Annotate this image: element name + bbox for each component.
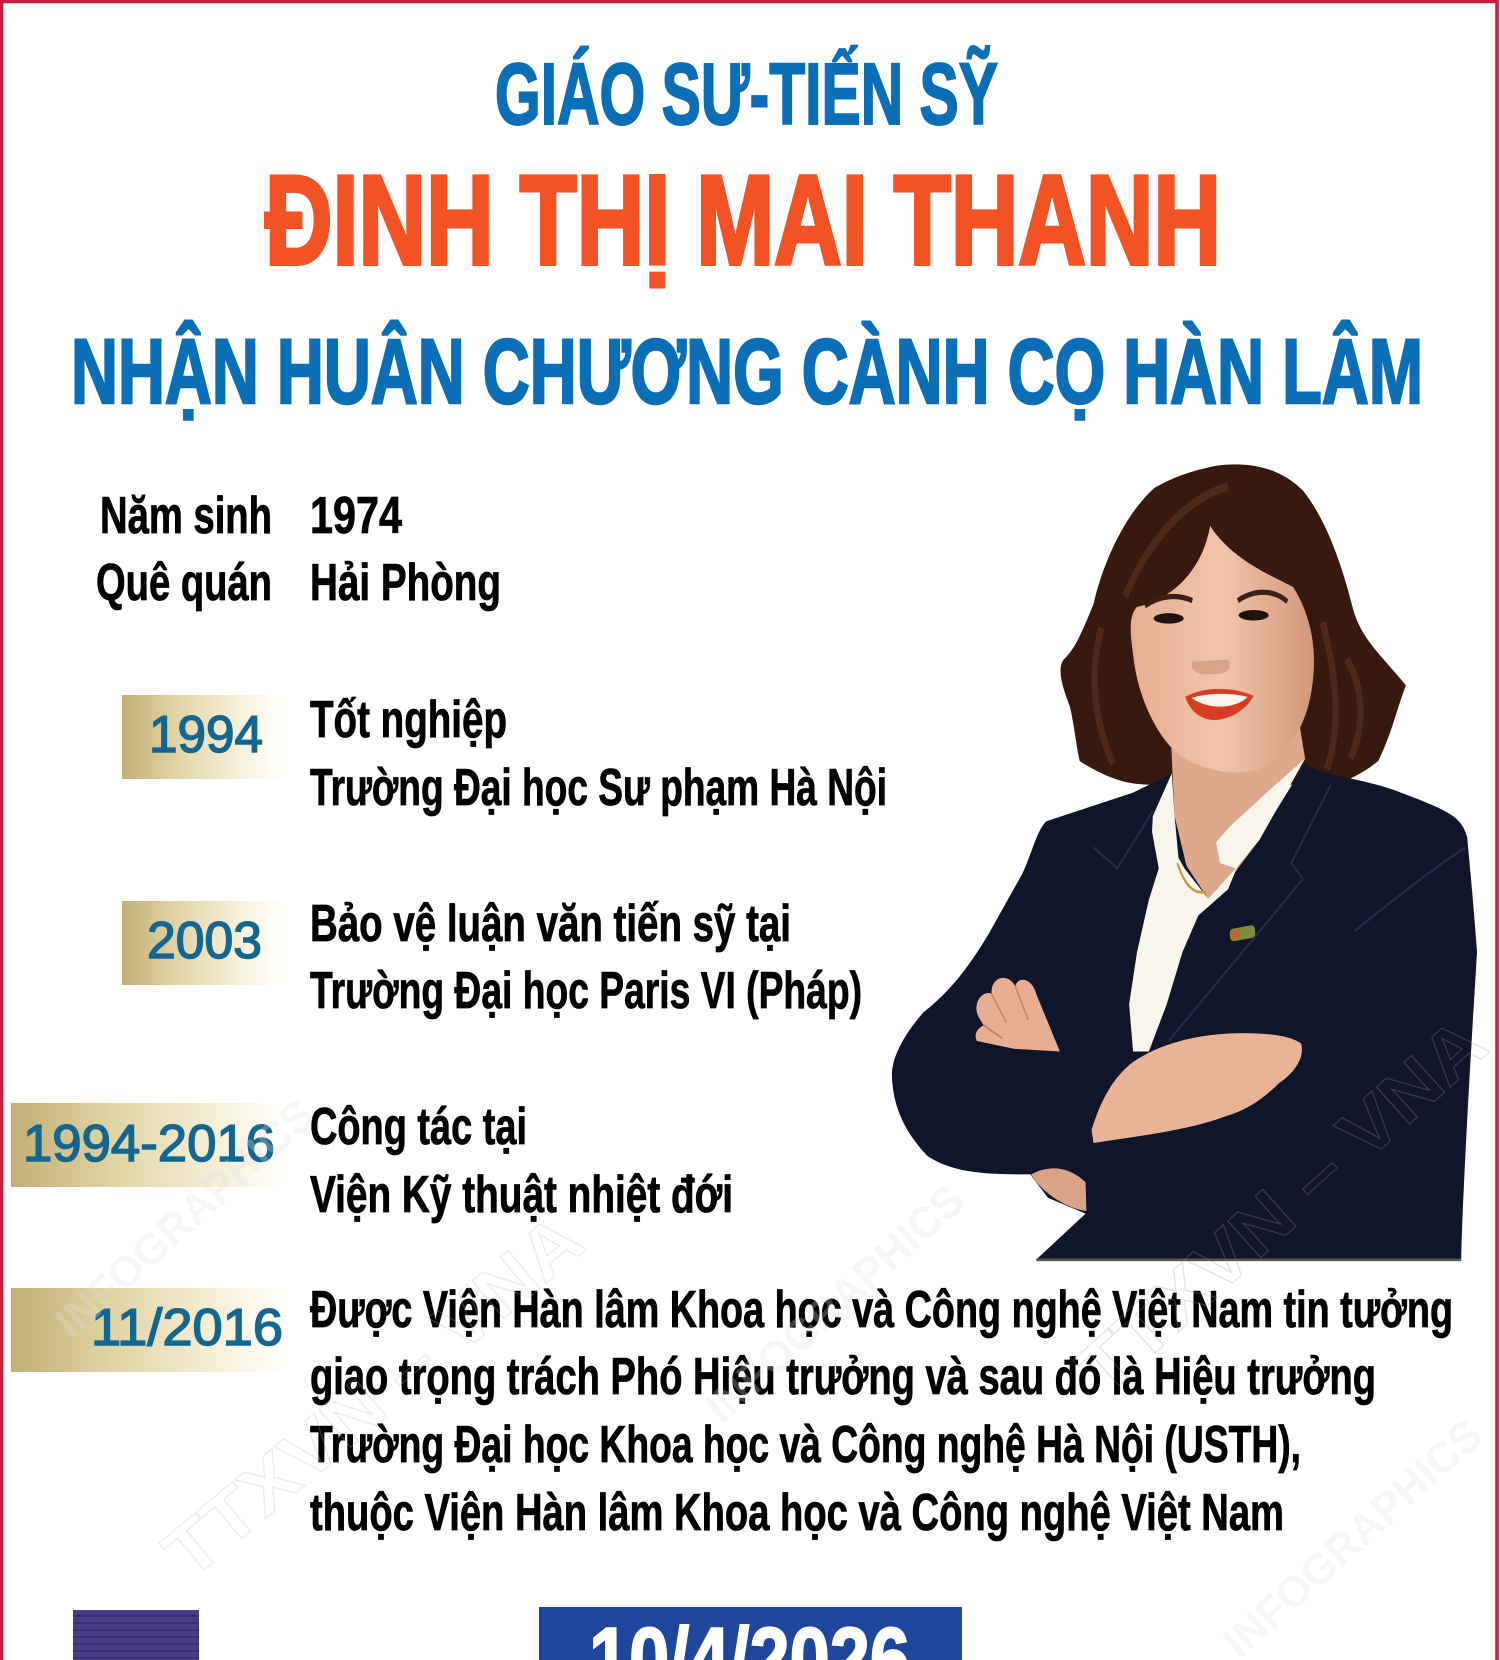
text 11/2016	[310, 1281, 1453, 1542]
hand	[976, 978, 1060, 1051]
shirt	[1129, 759, 1305, 1051]
medal ribbon	[73, 1610, 199, 1660]
timeline 1994-2016	[11, 1098, 733, 1224]
text 2003: Trường Đại học Paris VI (Pháp)	[310, 962, 862, 1020]
hair highlights	[1095, 487, 1361, 769]
lower hand	[1031, 1168, 1086, 1211]
title	[71, 46, 1423, 423]
text 2003: Bảo vệ luận văn tiến sỹ tại	[310, 895, 791, 953]
title line 1: GIÁO SƯ-TIẾN SỸ	[495, 46, 998, 143]
timeline 1994	[122, 691, 887, 817]
year label 1994: 1994	[149, 706, 263, 764]
text 1994-2016	[310, 1098, 733, 1224]
text: TTXVN – VNA	[149, 1199, 599, 1594]
portrait photo	[892, 464, 1477, 1261]
hometown	[96, 554, 501, 612]
hometown: Hải Phòng	[310, 554, 501, 612]
text: INFOGRAPHICS	[46, 1090, 324, 1347]
mouth	[1185, 689, 1254, 720]
text 1994-2016: Viện Kỹ thuật nhiệt đới	[310, 1166, 733, 1224]
finger lines	[984, 986, 1028, 1038]
timeline 11/2016	[11, 1281, 1453, 1542]
text: INFOGRAPHICS	[696, 1175, 974, 1432]
year label 2003: 2003	[147, 912, 262, 970]
date box	[539, 1607, 962, 1660]
birth year: 1974	[310, 487, 402, 545]
text 1994: Trường Đại học Sư phạm Hà Nội	[310, 759, 887, 817]
face	[1131, 526, 1314, 773]
year label 1994	[122, 695, 286, 779]
text: TTXVN – VNA	[1062, 1002, 1500, 1410]
nose	[1192, 659, 1230, 674]
hometown: Quê quán	[96, 554, 272, 612]
year label 2003	[122, 901, 286, 985]
hair back	[1061, 464, 1406, 785]
personal details	[96, 487, 501, 612]
jacket body	[892, 764, 1477, 1260]
neck	[1171, 722, 1305, 899]
year label 11/2016: 11/2016	[91, 1299, 283, 1357]
lapel pin	[1229, 925, 1256, 942]
year label 1994-2016	[11, 1103, 286, 1187]
text 1994	[310, 691, 887, 817]
text 2003	[310, 895, 862, 1020]
text 1994-2016: Công tác tại	[310, 1098, 527, 1156]
year label 11/2016	[11, 1288, 286, 1372]
forearm	[1092, 1033, 1302, 1143]
timeline 2003	[122, 895, 862, 1020]
necklace	[1177, 863, 1206, 892]
jacket lapel lines	[1094, 785, 1465, 1041]
birth year: Năm sinh	[100, 487, 272, 545]
eyebrows	[1145, 592, 1287, 606]
text: INFOGRAPHICS	[1214, 1410, 1492, 1660]
year label 1994-2016: 1994-2016	[23, 1115, 275, 1173]
text 1994: Tốt nghiệp	[310, 691, 507, 749]
photo bottom edge	[1036, 1259, 1461, 1261]
eyes	[1154, 610, 1269, 624]
